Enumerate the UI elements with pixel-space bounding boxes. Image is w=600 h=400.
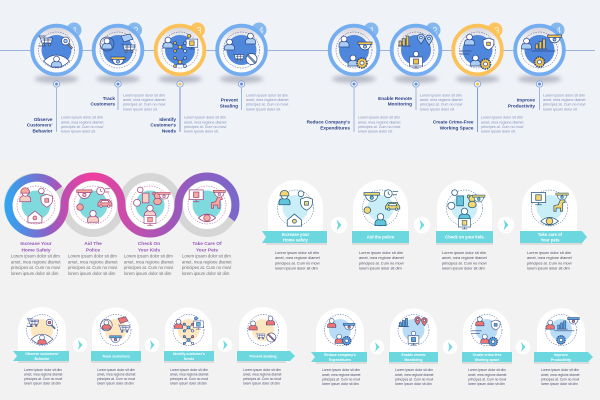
panel: home security cards xyxy=(262,180,587,271)
description: amet, mea regione diamet xyxy=(124,259,174,264)
description: Lorem ipsum dolor sit dim xyxy=(358,116,400,120)
description: lorem ipsum dolor sit dim xyxy=(97,382,134,386)
icon: create xyxy=(453,26,502,83)
heading: check on your kids: Check On xyxy=(138,241,160,247)
panel: home security ribbon xyxy=(8,176,236,276)
heading: take care of your pets: Take Care Of xyxy=(192,241,222,247)
description: amet, mea regione diamet xyxy=(481,120,523,124)
card 1 xyxy=(311,308,367,386)
description: lorem ipsum dolor sit. xyxy=(246,107,281,111)
heading: check on your kids: Your Kids xyxy=(138,248,160,254)
dome xyxy=(537,308,585,353)
description: amet, mea regione diamet xyxy=(420,98,462,102)
heading: Reduce Company's xyxy=(307,119,350,124)
connector pin xyxy=(474,81,481,132)
badge 2: 2 xyxy=(133,26,139,36)
description: Lorem ipsum dolor sit dim xyxy=(481,116,523,120)
band: Create crime-free xyxy=(473,353,501,357)
description: amet, mea regione diamet xyxy=(275,256,321,260)
description: amet, mea regione diamet xyxy=(359,256,405,260)
card 4 xyxy=(237,307,295,386)
description: Lorem ipsum dolor sit dim xyxy=(275,251,319,255)
icon: create xyxy=(471,314,502,346)
arrow xyxy=(73,338,87,352)
description: lorem ipsum dolor sit dim xyxy=(395,382,432,386)
heading: Needs xyxy=(162,128,176,133)
description: principes at. Cum no movi xyxy=(358,125,400,129)
badge 2: 2 xyxy=(432,26,438,36)
description: amet, mea regione diamet xyxy=(182,259,232,264)
band: Track customers xyxy=(102,354,130,358)
heading: Observe xyxy=(34,117,53,122)
band: Take care of xyxy=(538,232,563,237)
step 2: track customers xyxy=(90,22,165,111)
description: Lorem ipsum dolor sit dim xyxy=(442,251,486,255)
icon: enable xyxy=(392,26,440,83)
connector pin xyxy=(115,81,121,110)
card 1 xyxy=(262,180,327,271)
heading: Monitoring xyxy=(388,102,412,107)
dome xyxy=(522,180,577,232)
description: lorem ipsum dolor sit dim xyxy=(359,267,402,271)
band xyxy=(164,351,214,363)
icon: identify xyxy=(173,314,204,346)
dome xyxy=(463,308,510,353)
icon: identify xyxy=(156,26,204,83)
arrow xyxy=(331,217,347,233)
description: principes at. Cum no movi xyxy=(24,377,63,381)
gradient ribbon xyxy=(9,176,236,234)
description: Lorem ipsum dolor sit dim xyxy=(182,254,231,258)
description: amet, mea regione diamet xyxy=(68,259,118,264)
description: Lorem ipsum dolor sit dim xyxy=(11,254,60,258)
description: amet, mea regione diamet xyxy=(243,372,282,376)
panel: workplace security cards xyxy=(311,308,593,386)
band: Aid the police xyxy=(367,234,395,240)
heading: increase your home safety: Increase Your xyxy=(20,241,52,247)
band xyxy=(462,352,512,364)
dome xyxy=(165,308,212,352)
description: Lorem ipsum dolor sit dim xyxy=(184,116,226,120)
description: lorem ipsum dolor sit dim xyxy=(182,271,230,276)
icon: observe xyxy=(32,26,81,83)
icon: track xyxy=(94,26,142,83)
heading: Customers xyxy=(90,102,115,107)
heading: aid the police: Police xyxy=(86,248,100,254)
description: Lorem ipsum dolor sit dim xyxy=(322,368,360,372)
band: Productivity xyxy=(551,358,571,362)
icon: reduce xyxy=(324,314,356,346)
band: Prevent stealing xyxy=(249,354,277,358)
icon: prevent xyxy=(248,314,278,346)
dome xyxy=(390,309,437,353)
step 2: enable remote monitoring xyxy=(378,22,462,111)
description: Lorem ipsum dolor sit dim xyxy=(246,93,288,97)
card 1 xyxy=(13,307,69,386)
band: Increase your xyxy=(282,232,309,237)
band: Expenditures xyxy=(329,358,351,362)
icon: observe xyxy=(26,314,58,346)
description: lorem ipsum dolor sit. xyxy=(123,107,158,111)
band xyxy=(520,231,587,245)
connector pin xyxy=(177,81,183,132)
card 2 xyxy=(91,308,141,386)
description: Lorem ipsum dolor sit dim xyxy=(420,93,462,97)
description: Lorem ipsum dolor sit dim xyxy=(359,251,403,255)
arrow xyxy=(443,340,457,354)
heading: Prevent xyxy=(221,98,238,103)
description: amet, mea regione diamet xyxy=(11,259,61,264)
panel: workplace security timeline xyxy=(307,22,585,134)
description: Lorem ipsum dolor sit dim xyxy=(543,93,585,97)
heading: aid the police: Aid The xyxy=(84,241,102,247)
dome xyxy=(316,308,364,353)
icon: reduce xyxy=(330,26,378,83)
description: amet, mea regione diamet xyxy=(358,120,400,124)
connector pin xyxy=(53,81,60,132)
heading: Productivity xyxy=(508,103,535,108)
dome xyxy=(92,308,139,352)
arrow xyxy=(145,338,159,352)
dome xyxy=(18,307,66,352)
description: principes at. Cum no movi xyxy=(184,125,226,129)
band: Reduce company's xyxy=(324,353,356,357)
card 2 xyxy=(389,309,438,386)
description: principes at. Cum no movi xyxy=(246,103,288,107)
step 4: prevent stealing xyxy=(217,22,288,111)
panel: retail security timeline xyxy=(27,22,288,134)
description: principes at. Cum no movi xyxy=(541,377,580,381)
background: blue-grey upper area xyxy=(0,0,600,160)
description: Lorem ipsum dolor sit dim xyxy=(124,254,173,258)
description: principes at. Cum no movi xyxy=(395,377,434,381)
description: lorem ipsum dolor sit. xyxy=(420,107,455,111)
dome xyxy=(239,307,287,352)
heading: Track xyxy=(103,96,115,101)
description: principes at. Cum no movi xyxy=(359,261,404,265)
description: Lorem ipsum dolor sit dim xyxy=(123,93,165,97)
description: amet, mea regione diamet xyxy=(322,373,361,377)
description: amet, mea regione diamet xyxy=(541,373,580,377)
description: lorem ipsum dolor sit. xyxy=(481,130,516,134)
icon: improve xyxy=(546,314,579,346)
description: amet, mea regione diamet xyxy=(442,256,488,260)
band: Behavior xyxy=(35,357,50,361)
description: lorem ipsum dolor sit dim xyxy=(124,271,172,276)
arrow xyxy=(218,338,232,352)
background: grey lower area xyxy=(0,160,600,400)
description: amet, mea regione diamet xyxy=(184,120,226,124)
heading: Behavior xyxy=(32,128,53,133)
description: Lorem ipsum dolor sit dim xyxy=(527,251,571,255)
dome xyxy=(268,180,323,232)
description: Lorem ipsum dolor sit dim xyxy=(68,254,117,258)
description: principes at. Cum no movi xyxy=(182,265,231,270)
heading: Customer's xyxy=(150,122,176,127)
band xyxy=(13,351,69,363)
icon: pets xyxy=(531,190,568,226)
band xyxy=(311,352,367,364)
description: Lorem ipsum dolor sit dim xyxy=(24,368,62,372)
description: Lorem ipsum dolor sit dim xyxy=(97,368,135,372)
heading: Customers' xyxy=(27,122,52,127)
description: lorem ipsum dolor sit dim xyxy=(275,267,318,271)
description: amet, mea regione diamet xyxy=(170,372,209,376)
heading: Stealing xyxy=(220,103,238,108)
description: Lorem ipsum dolor sit dim xyxy=(468,368,506,372)
step 1: observe customers' behavior xyxy=(27,22,103,134)
description: principes at. Cum no movi xyxy=(61,125,103,129)
heading: increase your home safety: Home Safety xyxy=(21,248,51,254)
description: principes at. Cum no movi xyxy=(322,377,361,381)
description: amet, mea regione diamet xyxy=(543,98,585,102)
description: Lorem ipsum dolor sit dim xyxy=(61,116,103,120)
band xyxy=(534,352,593,364)
description: principes at. Cum no movi xyxy=(170,377,209,381)
description: Lorem ipsum dolor sit dim xyxy=(243,368,281,372)
description: principes at. Cum no movi xyxy=(543,103,585,107)
description: amet, mea regione diamet xyxy=(468,373,507,377)
timeline connector xyxy=(0,50,595,52)
description: principes at. Cum no movi xyxy=(11,265,60,270)
description: Lorem ipsum dolor sit dim xyxy=(170,368,208,372)
icon: home safety xyxy=(278,190,314,226)
description: lorem ipsum dolor sit dim xyxy=(243,382,280,386)
icon: kids xyxy=(131,186,170,226)
band: Home safety xyxy=(283,237,309,242)
badge 4: 4 xyxy=(556,26,561,36)
arrow xyxy=(516,340,530,354)
card 3 xyxy=(462,308,512,386)
description: lorem ipsum dolor sit dim xyxy=(527,267,570,271)
description: lorem ipsum dolor sit. xyxy=(184,130,219,134)
description: amet, mea regione diamet xyxy=(97,372,136,376)
description: principes at. Cum no movi xyxy=(97,377,136,381)
connector pin xyxy=(351,81,357,132)
description: lorem ipsum dolor sit. xyxy=(61,130,96,134)
description: lorem ipsum dolor sit dim xyxy=(11,271,59,276)
band: Improve xyxy=(554,353,568,357)
badge 1: 1 xyxy=(369,26,375,36)
heading: take care of your pets: Your Pets xyxy=(196,248,218,254)
badge 4: 4 xyxy=(258,26,264,36)
band: Working space xyxy=(475,358,499,362)
description: principes at. Cum no movi xyxy=(275,261,320,265)
heading: Working Space xyxy=(440,125,474,130)
description: principes at. Cum no movi xyxy=(243,377,282,381)
description: amet, mea regione diamet xyxy=(527,256,573,260)
description: amet, mea regione diamet xyxy=(123,98,165,102)
band: Monitoring xyxy=(404,358,423,362)
heading: Enable Remote xyxy=(378,96,412,101)
step 1: reduce company's expenditures xyxy=(307,22,400,134)
arrow xyxy=(370,340,384,354)
description: lorem ipsum dolor sit dim xyxy=(541,382,578,386)
description: principes at. Cum no movi xyxy=(481,125,523,129)
description: lorem ipsum dolor sit. xyxy=(543,107,578,111)
description: principes at. Cum no movi xyxy=(527,261,572,265)
card 3 xyxy=(164,308,214,386)
description: principes at. Cum no movi xyxy=(124,265,173,270)
description: principes at. Cum no movi xyxy=(442,261,487,265)
description: lorem ipsum dolor sit dim xyxy=(468,382,505,386)
description: amet, mea regione diamet xyxy=(246,98,288,102)
card 4 xyxy=(520,180,587,271)
panel: retail security cards xyxy=(13,307,295,386)
description: amet, mea regione diamet xyxy=(395,373,434,377)
band: Your pets xyxy=(540,237,560,242)
connector pin xyxy=(413,81,419,110)
heading: Improve xyxy=(517,98,535,103)
description: lorem ipsum dolor sit dim xyxy=(170,382,207,386)
icon: enable xyxy=(398,314,429,346)
step 3: create crime-free working space xyxy=(433,22,523,134)
card 2 xyxy=(352,180,409,271)
connector pin xyxy=(536,81,543,110)
arrow xyxy=(414,217,430,233)
icon: home safety xyxy=(17,186,55,224)
description: lorem ipsum dolor sit dim xyxy=(322,382,359,386)
badge 3: 3 xyxy=(494,26,500,36)
description: Lorem ipsum dolor sit dim xyxy=(395,368,433,372)
step 4: improve productivity xyxy=(508,22,585,111)
description: lorem ipsum dolor sit dim xyxy=(24,382,61,386)
description: amet, mea regione diamet xyxy=(24,372,63,376)
band: Observe customers' xyxy=(25,352,59,356)
arrow xyxy=(498,217,514,233)
icon: prevent xyxy=(217,26,266,83)
description: principes at. Cum no movi xyxy=(123,103,165,107)
badge 3: 3 xyxy=(196,26,202,36)
heading: Create Crime-Free xyxy=(433,120,474,125)
band: Enable remote xyxy=(401,353,426,357)
step 3: identify customer's needs xyxy=(150,22,226,134)
dome xyxy=(437,180,492,232)
icon: kids xyxy=(446,190,485,229)
description: principes at. Cum no movi xyxy=(468,377,507,381)
description: Lorem ipsum dolor sit dim xyxy=(541,368,579,372)
heading: Expenditures xyxy=(320,125,350,130)
description: lorem ipsum dolor sit dim xyxy=(442,267,485,271)
description: principes at. Cum no movi xyxy=(68,265,117,270)
band xyxy=(389,352,438,364)
description: lorem ipsum dolor sit dim xyxy=(68,271,116,276)
description: amet, mea regione diamet xyxy=(61,120,103,124)
heading: Identify xyxy=(159,117,176,122)
icon: police xyxy=(362,190,400,226)
band xyxy=(262,231,327,245)
dome xyxy=(353,180,408,232)
connector pin xyxy=(238,81,245,110)
icon: track xyxy=(100,314,131,346)
description: lorem ipsum dolor sit. xyxy=(358,130,393,134)
band: Needs xyxy=(184,357,194,361)
card 4 xyxy=(534,308,593,386)
icon: pets xyxy=(188,186,226,224)
card 3 xyxy=(436,180,493,271)
band: Check on your kids xyxy=(445,234,484,240)
icon: police xyxy=(74,186,112,224)
grey ring backdrop xyxy=(8,177,235,233)
badge 1: 1 xyxy=(72,26,78,36)
icon: improve xyxy=(515,26,564,83)
description: principes at. Cum no movi xyxy=(420,103,462,107)
band: Identify customer's xyxy=(173,352,205,356)
